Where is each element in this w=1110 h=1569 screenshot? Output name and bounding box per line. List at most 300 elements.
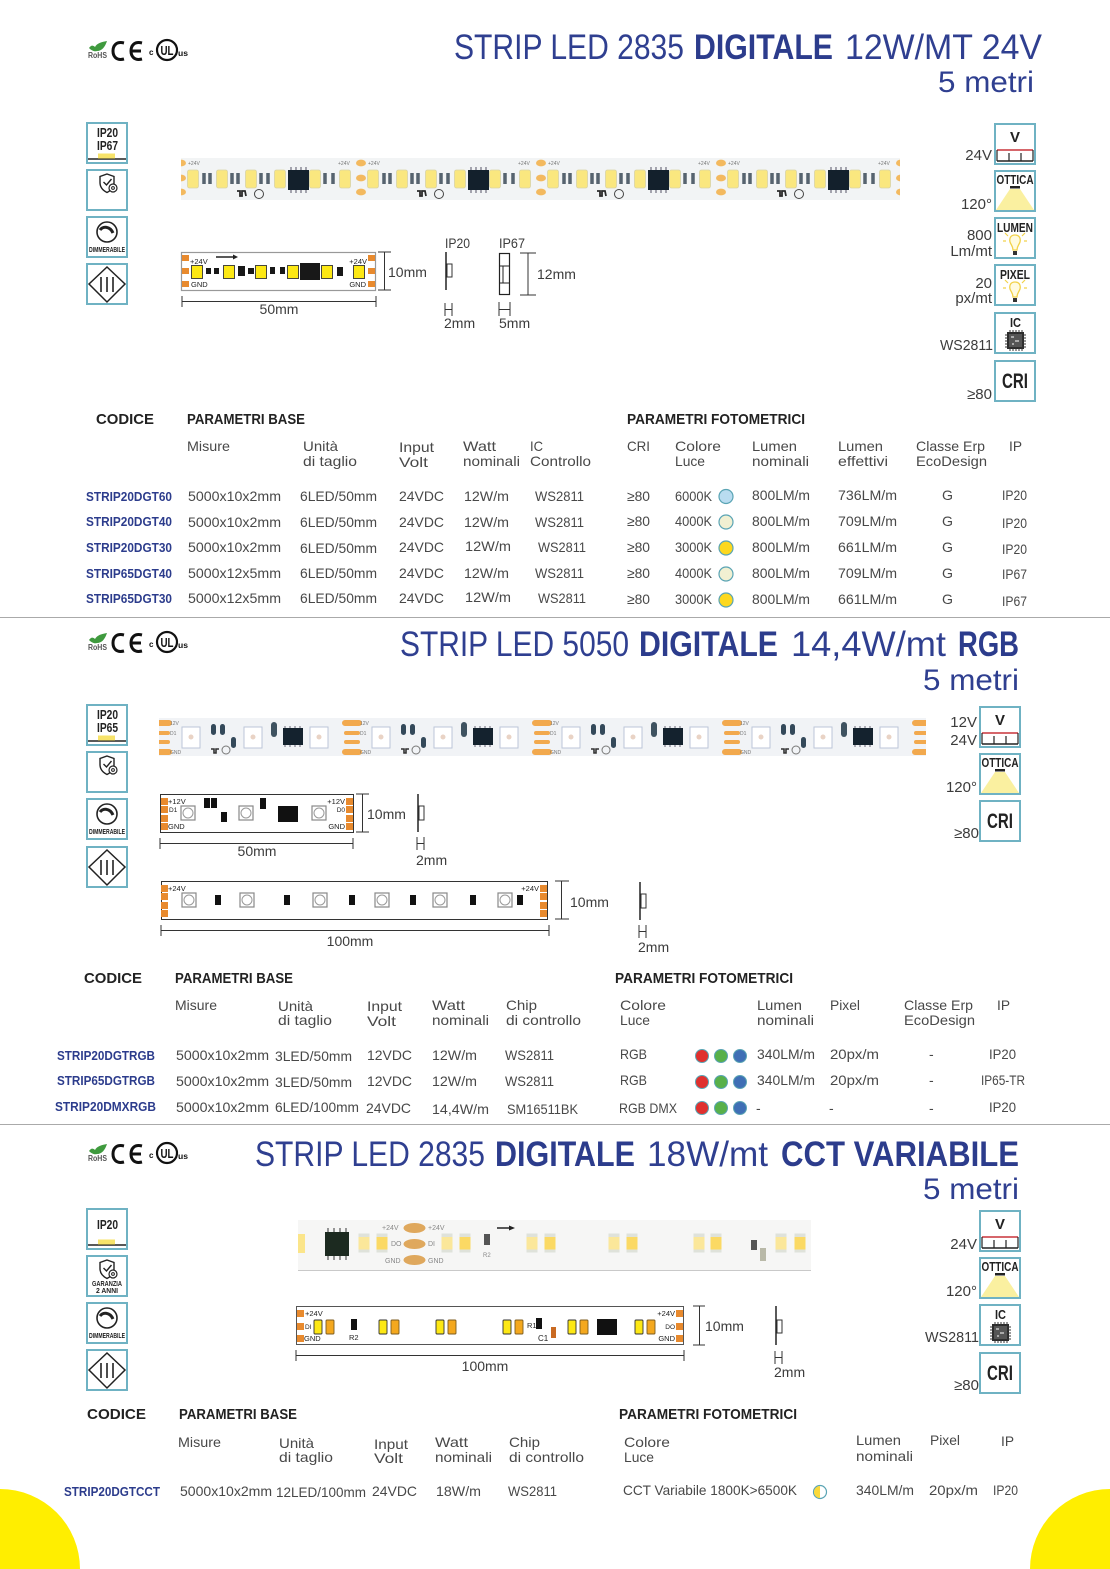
table 2 row 1 (57, 1046, 1016, 1064)
title: RGB (958, 625, 1019, 664)
strip diagram 100mm: R2 (349, 1333, 359, 1342)
spec: voltage: 24V (965, 147, 992, 164)
table 3 headings: PARAMETRI BASE (179, 1406, 297, 1423)
spec: optics: OTTICA (996, 172, 1034, 187)
table 2 headings: PARAMETRI FOTOMETRICI (615, 970, 793, 987)
table 3 headings (87, 1406, 1014, 1466)
table 2 row 2 (57, 1072, 1025, 1090)
table 2 headings: Watt (432, 997, 465, 1013)
title (255, 1135, 1019, 1174)
profile IP67: 12mm (537, 266, 576, 282)
spec: voltage: V (995, 712, 1005, 729)
table 2 headings: Input (367, 998, 402, 1014)
table 1 row 4: 5000x12x5mm (188, 565, 281, 581)
divider 2 (0, 1124, 1110, 1126)
certification logos: RoHS (88, 1154, 108, 1163)
table 3 headings: Lumen (856, 1432, 901, 1448)
icon: dimmable: DIMMERABILE (89, 1333, 125, 1340)
profile 2mm (774, 1306, 805, 1380)
strip photo: +24V (188, 161, 200, 167)
table 3 headings: nominali (435, 1449, 492, 1465)
strip photo: +24V (698, 161, 710, 167)
table 3 headings: Colore (624, 1434, 670, 1450)
strip photo: GND (170, 750, 182, 756)
table 1 row 3: 3000K (675, 539, 713, 555)
title: STRIP LED 5050 (400, 625, 629, 664)
left icon column (87, 705, 127, 887)
table 1 row 5: 3000K (675, 591, 713, 607)
spec: CRI: ≥80 (954, 825, 979, 842)
table 2 row 3: RGB DMX (619, 1100, 678, 1116)
table 3 row 1: 20px/m (929, 1482, 978, 1498)
table 1 headings: IP (1009, 438, 1022, 454)
profile 2mm second: 2mm (638, 939, 669, 955)
strip photo: 12V (170, 721, 180, 727)
table 2 row 1: 20px/m (830, 1046, 879, 1062)
spec: optics (946, 754, 1020, 796)
table 1 row 2 (86, 513, 1027, 531)
table 2 headings: Pixel (830, 997, 860, 1013)
strip photo: +24V (368, 161, 380, 167)
table 1 row 5: ≥80 (627, 591, 650, 607)
title (454, 28, 1043, 67)
table 2 row 1: WS2811 (505, 1047, 554, 1063)
strip photo: +24V (878, 161, 890, 167)
certification logos: RoHS (88, 51, 108, 60)
table 3 row 1: CCT Variabile 1800K>6500K (623, 1482, 798, 1498)
subtitle: 5 metri (923, 664, 1019, 697)
strip photo: GND (550, 750, 562, 756)
panel: product 3 (64, 1135, 1020, 1500)
table 2 row 2: IP65-TR (981, 1072, 1025, 1088)
table 2 headings: IP (997, 997, 1010, 1013)
table 3 headings: Misure (178, 1434, 221, 1450)
spec: voltage: V (995, 1216, 1005, 1233)
strip photo (181, 158, 900, 200)
spec: IC: WS2811 (925, 1329, 979, 1346)
strip photo: R2 (483, 1253, 491, 1259)
strip photo: +24V (382, 1225, 399, 1232)
strip diagram 100mm (296, 1306, 744, 1374)
table 1 row 2: 4000K (675, 513, 713, 529)
icon: warranty shield: 2 ANNI (96, 1288, 118, 1295)
spec: IC: IC (995, 1307, 1007, 1322)
right icon column (940, 124, 1035, 403)
table 1 row 2: ≥80 (627, 513, 650, 529)
icon: warranty shield (87, 752, 127, 792)
panel: product 2 (55, 625, 1088, 1117)
table 1 row 5: 12W/m (465, 589, 511, 605)
left icon column (87, 123, 127, 304)
panel: product 1 (86, 28, 1070, 609)
spec: lumen: LUMEN (997, 220, 1033, 235)
table 1 row 4: 709LM/m (838, 565, 897, 581)
table 1 row 5 (86, 589, 1027, 609)
strip diagram 50mm: +12V (168, 797, 186, 806)
strip photo: GND (428, 1258, 444, 1265)
table 1 row 5: 661LM/m (838, 591, 897, 607)
icon: class III (87, 847, 127, 887)
spec: voltage: 24V (950, 1236, 977, 1253)
spec: pixel (955, 265, 1035, 307)
table 1 row 1: 24VDC (399, 488, 444, 504)
spec: pixel: PIXEL (1000, 267, 1030, 282)
table 1 row 3: 661LM/m (838, 539, 897, 555)
certification logos (88, 40, 189, 60)
strip diagram 50mm (182, 252, 427, 317)
strip diagram 100mm: DI (305, 1324, 312, 1331)
table 1 row 3: IP20 (1002, 541, 1027, 557)
table 1 row 3: 6LED/50mm (300, 540, 377, 556)
spec: optics: 120° (961, 196, 992, 213)
table 1 row 3: WS2811 (538, 539, 586, 555)
strip photo (298, 1220, 811, 1270)
table 1 row 3: STRIP20DGT30 (86, 541, 172, 555)
certification logos: us (178, 49, 189, 58)
title: 14,4W/mt (791, 625, 946, 664)
table 1 headings: Misure (187, 438, 230, 454)
table 1 row 3: G (942, 539, 953, 555)
table 1 row 1: G (942, 487, 953, 503)
table 2 row 2: 20px/m (830, 1072, 879, 1088)
icon: IP rating: IP65 (97, 720, 118, 735)
table 2 headings: Chip (506, 997, 537, 1013)
table 1 row 3: 24VDC (399, 539, 444, 555)
table 1 row 4: 4000K (675, 565, 713, 581)
strip photo: D1 (170, 731, 177, 737)
table 3 headings: Watt (435, 1434, 468, 1450)
subtitle: 5 metri (923, 1173, 1019, 1206)
strip diagram 100mm: 100mm (462, 1358, 508, 1374)
table 1 row 1: STRIP20DGT60 (86, 490, 172, 504)
strip diagram 50mm: 10mm (388, 264, 427, 280)
strip photo: +24V (728, 161, 740, 167)
table 2 (55, 970, 1025, 1117)
strip diagram 100mm: 10mm (705, 1318, 744, 1334)
table 1 row 5: IP67 (1002, 593, 1027, 609)
strip photo: DO (391, 1241, 402, 1248)
table 1 row 5: G (942, 591, 953, 607)
icon: IP rating: IP67 (97, 138, 118, 153)
strip photo: +24V (518, 161, 530, 167)
table 1 row 4: 6LED/50mm (300, 565, 377, 581)
table 1 row 2: 5000x10x2mm (188, 514, 281, 530)
table 1 row 1: ≥80 (627, 488, 650, 504)
spec: IC: WS2811 (940, 337, 993, 354)
profile IP20: 2mm (444, 315, 475, 331)
divider 1 (0, 616, 1110, 618)
spec: voltage (950, 1211, 1020, 1253)
certification logos: RoHS (88, 643, 108, 652)
profile IP20: IP20 (445, 235, 470, 251)
subtitle: 5 metri (938, 66, 1034, 99)
table 1 row 2: 800LM/m (752, 513, 810, 529)
table 3 headings: Volt (374, 1450, 403, 1466)
table 3 headings: Input (374, 1436, 408, 1452)
spec: IC (925, 1305, 1020, 1346)
spec: CRI: ≥80 (954, 1377, 979, 1394)
strip diagram 50mm (160, 794, 406, 859)
table 1 headings: Controllo (530, 453, 591, 469)
table 1 row 1: 6000K (675, 488, 713, 504)
table 3 headings: Pixel (930, 1432, 960, 1448)
table 2 row 3: 14,4W/m (432, 1101, 489, 1117)
table 1 row 1: 6LED/50mm (300, 488, 377, 504)
table 3 headings: PARAMETRI FOTOMETRICI (619, 1406, 797, 1423)
table 1 headings: CODICE (96, 411, 154, 428)
title: STRIP LED 2835 (454, 28, 684, 67)
table 1 row 2: 6LED/50mm (300, 514, 377, 530)
table 2 row 1: IP20 (989, 1046, 1016, 1062)
strip diagram 100mm (161, 881, 609, 949)
icon: IP rating: IP20 (97, 125, 118, 140)
strip diagram 100mm: 100mm (327, 933, 373, 949)
strip photo: GND (385, 1258, 401, 1265)
table 2 row 3: 6LED/100mm (275, 1099, 359, 1115)
table 3 row 1: 5000x10x2mm (180, 1483, 272, 1499)
strip photo: +24V (428, 1225, 445, 1232)
table 1 row 1: IP20 (1002, 487, 1027, 503)
table 1 headings: effettivi (838, 453, 888, 469)
table 2 row 1: - (929, 1046, 934, 1062)
spec: CRI: CRI (987, 810, 1013, 833)
strip photo: GND (740, 750, 752, 756)
table 1 headings: Watt (463, 438, 496, 454)
table 1 row 2: G (942, 513, 953, 529)
certification logos (88, 632, 189, 652)
table 2 row 1: RGB (620, 1046, 647, 1062)
table 2 headings: Misure (175, 997, 217, 1013)
table 2 row 3 (55, 1099, 1016, 1117)
table 2 headings: Lumen (757, 997, 802, 1013)
strip photo: D1 (740, 731, 747, 737)
icon: dimmable (87, 799, 127, 839)
table 2 row 3: IP20 (989, 1099, 1016, 1115)
table 2 headings: Classe Erp (904, 997, 973, 1013)
title (400, 625, 1019, 664)
icon: dimmable: DIMMERABILE (89, 247, 125, 254)
table 3 headings: di taglio (279, 1449, 333, 1465)
strip diagram 50mm: 10mm (367, 806, 406, 822)
table 1 row 3 (86, 538, 1027, 557)
strip diagram 50mm: D1 (169, 807, 178, 814)
table 2 row 2: WS2811 (505, 1073, 554, 1089)
title: 12W/MT 24V (845, 28, 1043, 67)
panel: yellow corner right (1030, 1489, 1110, 1569)
spec: optics: 120° (946, 779, 977, 796)
spec: optics (946, 1258, 1020, 1300)
title: STRIP LED 2835 (255, 1135, 485, 1174)
title: CCT VARIABILE (781, 1135, 1019, 1174)
table 1 headings: Colore (675, 438, 721, 454)
table 2 row 3: 24VDC (366, 1100, 411, 1116)
strip photo (159, 718, 926, 756)
certification logos: UL (160, 635, 174, 650)
spec: optics: OTTICA (982, 1259, 1019, 1274)
table 3 headings: Chip (509, 1434, 540, 1450)
table 1 row 5: STRIP65DGT30 (86, 592, 172, 606)
table 1 headings: PARAMETRI BASE (187, 411, 305, 428)
spec: IC (940, 313, 1035, 354)
spec: CRI (954, 1353, 1020, 1394)
table 1 row 3: 5000x10x2mm (188, 539, 281, 555)
left icon column (87, 1209, 127, 1390)
strip diagram 100mm: DO (665, 1324, 675, 1331)
table 2 headings: di controllo (506, 1012, 581, 1028)
certification logos: c (149, 640, 154, 649)
strip photo: +24V (548, 161, 560, 167)
table 2 row 2: - (929, 1072, 934, 1088)
strip diagram 100mm: R1 (527, 1321, 537, 1330)
table 1 headings: nominali (752, 453, 809, 469)
right icon column (925, 1211, 1020, 1394)
profile 2mm: 2mm (416, 852, 447, 868)
table 1 row 3: 800LM/m (752, 539, 810, 555)
table 3 row 1: 24VDC (372, 1483, 417, 1499)
table 3 row 1: IP20 (993, 1482, 1018, 1498)
strip photo: D1 (360, 731, 367, 737)
panel: yellow corner left (0, 1489, 80, 1569)
profile IP67: IP67 (499, 235, 525, 251)
icon: IP rating: IP20 (97, 707, 118, 722)
strip diagram 50mm: GND (168, 822, 185, 831)
icon: dimmable (87, 1303, 127, 1343)
strip diagram 50mm: GND (191, 280, 208, 289)
table 2 row 2: STRIP65DGTRGB (57, 1074, 155, 1088)
spec: lumen (950, 218, 1035, 260)
strip diagram 50mm: 50mm (238, 843, 276, 859)
strip photo: 12V (360, 721, 370, 727)
table 1 row 1: 5000x10x2mm (188, 488, 281, 504)
spec: voltage: 12V (950, 714, 977, 731)
strip diagram 100mm: 10mm (570, 894, 609, 910)
table 1 row 5: 6LED/50mm (300, 590, 377, 606)
icon: warranty shield: GARANZIA (92, 1281, 122, 1288)
spec: CRI: CRI (987, 1362, 1013, 1385)
strip diagram 50mm: +24V (190, 257, 208, 266)
table 1 headings: IC (530, 438, 543, 454)
table 2 row 3: 5000x10x2mm (176, 1099, 269, 1115)
icon: warranty shield (87, 170, 127, 210)
certification logos: UL (160, 1146, 174, 1161)
table 1 row 2: IP20 (1002, 515, 1027, 531)
table 2 headings: nominali (757, 1012, 814, 1028)
table 1 headings: PARAMETRI FOTOMETRICI (627, 411, 805, 428)
strip diagram 100mm: +24V (657, 1309, 675, 1318)
profile 2mm: 2mm (774, 1364, 805, 1380)
table 3 headings: nominali (856, 1448, 913, 1464)
table 1 headings: di taglio (303, 453, 357, 469)
strip diagram 50mm: 50mm (260, 301, 298, 317)
table 1 row 4: ≥80 (627, 565, 650, 581)
table 2 headings: PARAMETRI BASE (175, 970, 293, 987)
table 2 headings: Colore (620, 997, 666, 1013)
table 2 row 1: STRIP20DGTRGB (57, 1049, 155, 1063)
strip diagram 50mm: +24V (349, 257, 367, 266)
table 2 row 2: 340LM/m (757, 1072, 815, 1088)
spec: IC: IC (1010, 315, 1022, 330)
strip diagram 100mm: GND (658, 1334, 676, 1343)
spec: CRI: ≥80 (967, 386, 992, 403)
table 1 row 1: 12W/m (464, 488, 509, 504)
table 3 headings: Unità (279, 1435, 314, 1451)
table 3 row 1: WS2811 (508, 1483, 557, 1499)
certification logos: UL (160, 43, 174, 58)
spec: CRI: CRI (1002, 370, 1028, 393)
spec: optics: OTTICA (982, 755, 1019, 770)
table 2 headings: Volt (367, 1013, 396, 1029)
table 3 headings: CODICE (87, 1406, 146, 1423)
strip diagram 50mm: D0 (337, 807, 345, 814)
table 1 row 2: 709LM/m (838, 513, 897, 529)
strip photo: 12V (550, 721, 560, 727)
table 1 row 1: 736LM/m (838, 487, 897, 503)
table 2 headings: CODICE (84, 970, 142, 987)
spec: voltage: 24V (950, 732, 977, 749)
spec: optics (961, 171, 1035, 213)
spec: pixel: 20 (975, 275, 992, 292)
table 1 row 3: 12W/m (465, 538, 511, 554)
table 3 headings: Luce (624, 1449, 654, 1465)
certification logos: c (149, 48, 154, 57)
profile 2mm second (638, 882, 669, 955)
table 2 row 1: 12VDC (367, 1047, 412, 1063)
title: DIGITALE (694, 28, 833, 67)
certification logos: c (149, 1151, 154, 1160)
strip photo: 12V (740, 721, 750, 727)
table 1 headings: Luce (675, 453, 705, 469)
strip diagram 50mm: GND (349, 280, 367, 289)
strip diagram 100mm: C1 (538, 1334, 549, 1343)
strip diagram 50mm: +12V (327, 797, 345, 806)
table 1 row 5: 5000x12x5mm (188, 590, 281, 606)
table 1 row 1 (86, 487, 1027, 504)
table 3 row 1 (64, 1482, 1018, 1500)
table 1 row 4: IP67 (1002, 566, 1027, 582)
table 3 row 1: 340LM/m (856, 1482, 914, 1498)
table 2 row 2: 12W/m (432, 1073, 477, 1089)
icon: IP rating (87, 705, 127, 745)
table 1 (86, 411, 1027, 609)
table 3 (64, 1406, 1018, 1500)
icon: IP rating: IP20 (97, 1217, 118, 1232)
table 1 row 3: ≥80 (627, 539, 650, 555)
spec: voltage (950, 707, 1020, 749)
table 1 headings: Classe Erp (916, 438, 985, 454)
table 2 row 3: - (929, 1100, 934, 1116)
table 3 headings: IP (1001, 1433, 1014, 1449)
table 2 row 3: SM16511BK (507, 1101, 579, 1117)
icon: dimmable: DIMMERABILE (89, 829, 125, 836)
spec: CRI (967, 361, 1035, 403)
strip diagram 50mm: GND (328, 822, 346, 831)
table 1 row 2: STRIP20DGT40 (86, 515, 172, 529)
table 2 headings (84, 970, 1010, 1029)
certification logos (88, 1143, 189, 1163)
table 2 row 1: 3LED/50mm (275, 1048, 352, 1064)
table 2 row 2: 12VDC (367, 1073, 412, 1089)
table 1 headings: Lumen (752, 438, 797, 454)
spec: lumen: 800 (967, 227, 992, 244)
table 1 row 5: 24VDC (399, 590, 444, 606)
title: DIGITALE (639, 625, 778, 664)
table 2 headings: EcoDesign (904, 1012, 975, 1028)
icon: class III (87, 264, 127, 304)
table 2 headings: nominali (432, 1012, 489, 1028)
spec: CRI (954, 801, 1020, 842)
table 2 row 2: RGB (620, 1072, 647, 1088)
table 2 row 3: - (756, 1100, 761, 1116)
